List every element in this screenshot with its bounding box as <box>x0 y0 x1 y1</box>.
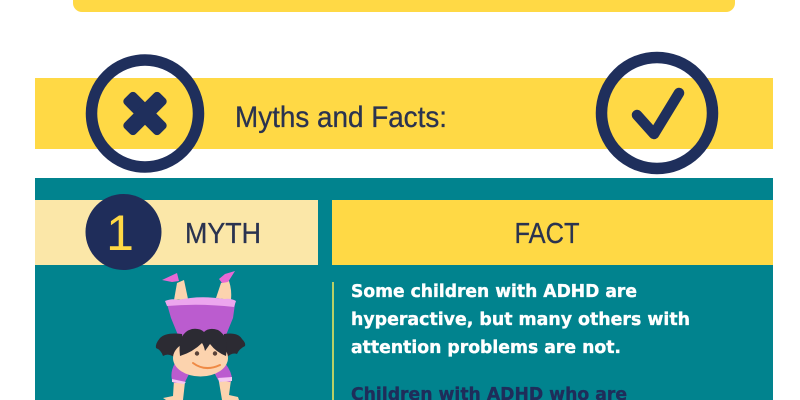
illustration: girl doing a handstand <box>156 271 245 400</box>
dress frill <box>165 297 236 307</box>
divider line <box>332 282 334 400</box>
fact header band: FACT <box>514 218 580 250</box>
fact text <box>351 282 690 400</box>
panel: myth 1 and fact <box>35 178 773 400</box>
fact text: Some children with ADHD are <box>351 282 637 302</box>
fact text: hyperactive, but many others with <box>351 310 690 330</box>
shoes <box>162 273 179 282</box>
fact text: attention problems are not. <box>351 338 621 358</box>
icon: check mark in circle <box>602 58 712 168</box>
dress <box>167 304 235 340</box>
head <box>173 340 228 376</box>
sleeve cuffs <box>172 377 232 384</box>
icon: cross in circle <box>92 60 198 167</box>
myth header band: MYTH <box>185 218 261 250</box>
legs <box>174 280 188 300</box>
smile <box>193 363 220 368</box>
top yellow banner <box>73 0 735 12</box>
hair pigtails <box>156 334 184 360</box>
number badge 1 <box>86 194 162 270</box>
arms <box>163 380 185 400</box>
myth header band <box>35 200 318 265</box>
heading band: myths and facts: Myths and Facts: <box>235 101 447 134</box>
sleeves <box>171 363 190 383</box>
hair <box>180 329 227 356</box>
heading band: myths and facts <box>35 78 773 149</box>
eyes <box>195 351 199 356</box>
number badge 1: 1 <box>106 205 134 261</box>
fact header band <box>332 200 773 265</box>
